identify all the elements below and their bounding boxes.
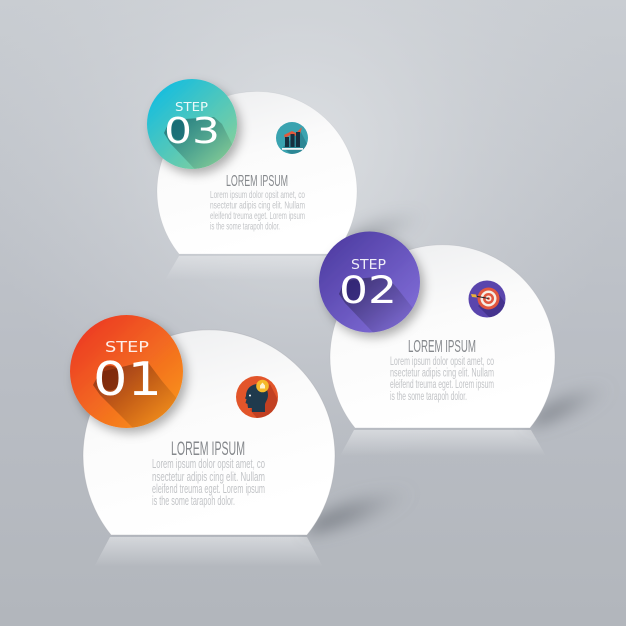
body text 1: eleifend treuma eget. Lorem ipsum — [152, 482, 265, 496]
label 2: STEP — [351, 257, 386, 273]
body text 1: is the some tarapoh dolor. — [152, 494, 235, 508]
label 3: STEP — [175, 99, 208, 114]
long shadow 2 — [339, 278, 412, 332]
panel: step 2 — [330, 245, 612, 456]
body text 2 — [390, 356, 494, 403]
body text 2: nsectetur adipis cing elit. Nullam — [390, 368, 494, 380]
body text 3: Lorem ipsum dolor opsit amet, co — [210, 189, 305, 201]
cast shadow 2 — [528, 386, 612, 426]
number 3: 03 — [164, 111, 220, 152]
number 0 counter 1 — [100, 366, 120, 390]
number 1: 01 — [93, 352, 162, 406]
cast shadow 1 — [305, 490, 414, 533]
heading 2: LOREM IPSUM — [408, 336, 476, 356]
badge: step 3 — [147, 79, 245, 180]
icon: bar chart — [276, 122, 308, 154]
badge: step 2 — [319, 232, 430, 345]
heading 3: LOREM IPSUM — [226, 173, 288, 190]
long shadow 3 — [164, 117, 232, 169]
body text 1: Lorem ipsum dolor opsit amet, co — [152, 457, 265, 471]
cast shadow 3 — [335, 212, 428, 254]
icon: head with light bulb — [236, 376, 278, 418]
card 3 — [157, 91, 357, 254]
number 0 counter 2 — [346, 280, 362, 300]
body text 2: eleifend treuma eget. Lorem ipsum — [390, 379, 494, 391]
badge: step 1 — [70, 315, 195, 440]
body text 3: is the some tarapoh dolor. — [210, 220, 280, 232]
floor reflection 2 — [340, 430, 546, 456]
panel: step 3 — [157, 92, 407, 270]
card 2 — [330, 245, 555, 428]
body text 2: Lorem ipsum dolor opsit amet, co — [390, 356, 494, 368]
label 1: STEP — [105, 338, 149, 356]
floor reflection 1 — [94, 537, 323, 567]
number 0 counter 3 — [171, 120, 187, 140]
heading 1: LOREM IPSUM — [171, 439, 245, 460]
long shadow 1 — [93, 361, 176, 428]
body text 3: nsectetur adipis cing elit. Nullam — [210, 200, 305, 212]
panel: step 1 — [83, 330, 390, 560]
floor reflection 3 — [165, 256, 350, 280]
body text 2: is the some tarapoh dolor. — [390, 391, 467, 403]
body text 3: eleifend treuma eget. Lorem ipsum — [210, 210, 305, 222]
icon: target — [468, 280, 506, 318]
card 1 — [83, 330, 335, 535]
number 2: 02 — [339, 269, 397, 312]
body text 1: nsectetur adipis cing elit. Nullam — [152, 470, 265, 484]
body text 1 — [152, 457, 265, 508]
body text 3 — [210, 189, 305, 232]
